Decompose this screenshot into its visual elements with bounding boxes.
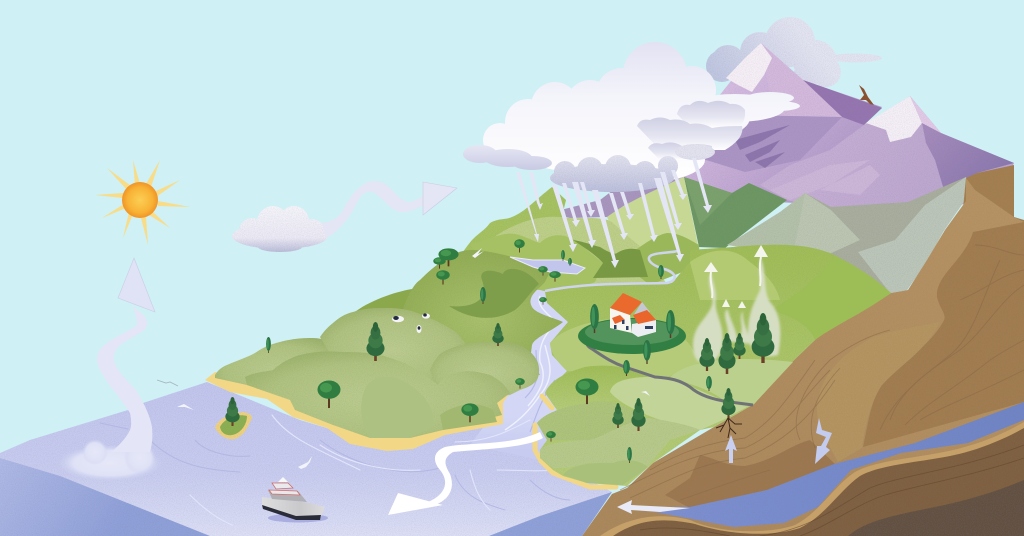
ocean front left: [0, 458, 210, 536]
arrow shaft: [97, 305, 152, 452]
deep brown stratum: [613, 428, 1024, 536]
back hill: [400, 250, 563, 375]
windows: [614, 320, 653, 330]
dark underbelly: [550, 144, 715, 192]
rear peak lit face: [736, 43, 842, 117]
third tier hill: [470, 234, 603, 295]
upper ridge field: [770, 256, 891, 340]
front hill inner fold: [361, 377, 434, 438]
back cloud behind peaks: [706, 17, 882, 88]
small drifting cloud: [232, 206, 328, 252]
ocean front right: [489, 492, 612, 536]
topsoil: [582, 178, 1024, 536]
rear peak shaded face: [803, 80, 882, 125]
shaded field: [449, 269, 539, 318]
rear peak snow: [726, 43, 772, 92]
aquifer: [600, 402, 1024, 536]
sun: [95, 160, 190, 245]
pale field: [610, 377, 747, 430]
lower rear hill: [670, 359, 793, 412]
walls: [610, 308, 632, 333]
steam arrows: [704, 245, 768, 308]
main roof: [610, 293, 642, 315]
rain arrows: [516, 158, 712, 268]
sand shore: [205, 372, 510, 451]
upper green tip: [457, 187, 566, 263]
cow hill: [320, 308, 467, 385]
upper grey bumps: [637, 101, 745, 160]
strata lines: [620, 245, 1024, 500]
groundwater: [633, 402, 1024, 527]
road: [587, 333, 753, 405]
left low hill: [215, 338, 345, 400]
river: [470, 284, 580, 460]
groundwater arrows: [617, 418, 832, 514]
bedrock: [848, 480, 1024, 536]
eagle: [859, 85, 874, 105]
right hill: [430, 342, 539, 400]
shaded sliver: [352, 289, 420, 315]
birds: [157, 248, 650, 469]
house lawn hill: [550, 318, 700, 385]
grey ridge left: [727, 193, 805, 262]
arrow: seepage to sea: [617, 500, 690, 514]
shore hill: [440, 404, 497, 430]
shaded valley: [573, 240, 648, 278]
sea surface: [0, 382, 612, 536]
trees: [225, 239, 774, 463]
far purple ridge: [549, 140, 880, 218]
arrow: capillary rise: [725, 435, 737, 463]
purple mountains: [549, 43, 1014, 218]
island: [215, 412, 252, 439]
hedge: [578, 318, 686, 354]
side roof: [633, 310, 656, 324]
boat: [262, 477, 328, 522]
arrow head: [118, 258, 155, 312]
front hill: [245, 351, 510, 438]
small knoll: [690, 251, 780, 300]
arrow: percolation: [815, 418, 832, 464]
strata in brown: [640, 445, 1024, 536]
cows: [392, 313, 430, 333]
house with hedge: [578, 293, 686, 354]
arrow: evaporation from sea: [58, 258, 162, 481]
rear peak: [660, 43, 895, 205]
grey ridge right: [858, 177, 972, 293]
right tier hill: [620, 233, 700, 285]
upper hills under the cloud: [457, 177, 700, 295]
soil cross-section: [582, 165, 1024, 536]
lower soil band: [600, 422, 1024, 536]
gable: [633, 302, 650, 316]
tree roots: [716, 418, 742, 438]
scree streaks: [735, 125, 790, 168]
rear soil block: [960, 165, 1024, 300]
front peak: [760, 96, 1014, 214]
lake: [510, 257, 585, 274]
pale field under rain: [607, 177, 699, 256]
left land: [205, 250, 563, 451]
main lower face: [690, 115, 842, 172]
darker deep strata: [863, 222, 1024, 447]
small porch roof: [612, 315, 625, 324]
water ripples: [100, 415, 570, 525]
second tier hill: [490, 217, 670, 290]
grey mountains: [727, 177, 972, 293]
green back mountain: [684, 177, 787, 248]
lower light hill: [540, 418, 700, 468]
steam base: [58, 439, 162, 481]
base slope: [537, 245, 891, 486]
mid lower hill: [537, 401, 648, 440]
arrow: river flow to sea: [388, 432, 543, 515]
sand shore right: [535, 396, 616, 487]
bottom hill: [563, 460, 648, 485]
left underside: [463, 145, 552, 170]
arrow: cloud drifting: [322, 181, 457, 238]
front peak shaded side: [922, 123, 1014, 190]
big rain cloud: [463, 42, 800, 192]
steam plumes: [693, 258, 780, 364]
front peak snow: [866, 96, 922, 142]
right land: [535, 245, 891, 487]
winding stream: [545, 251, 678, 291]
lower fields: [545, 366, 660, 410]
white cloud body: [483, 42, 800, 184]
stream and lake: [510, 251, 678, 291]
